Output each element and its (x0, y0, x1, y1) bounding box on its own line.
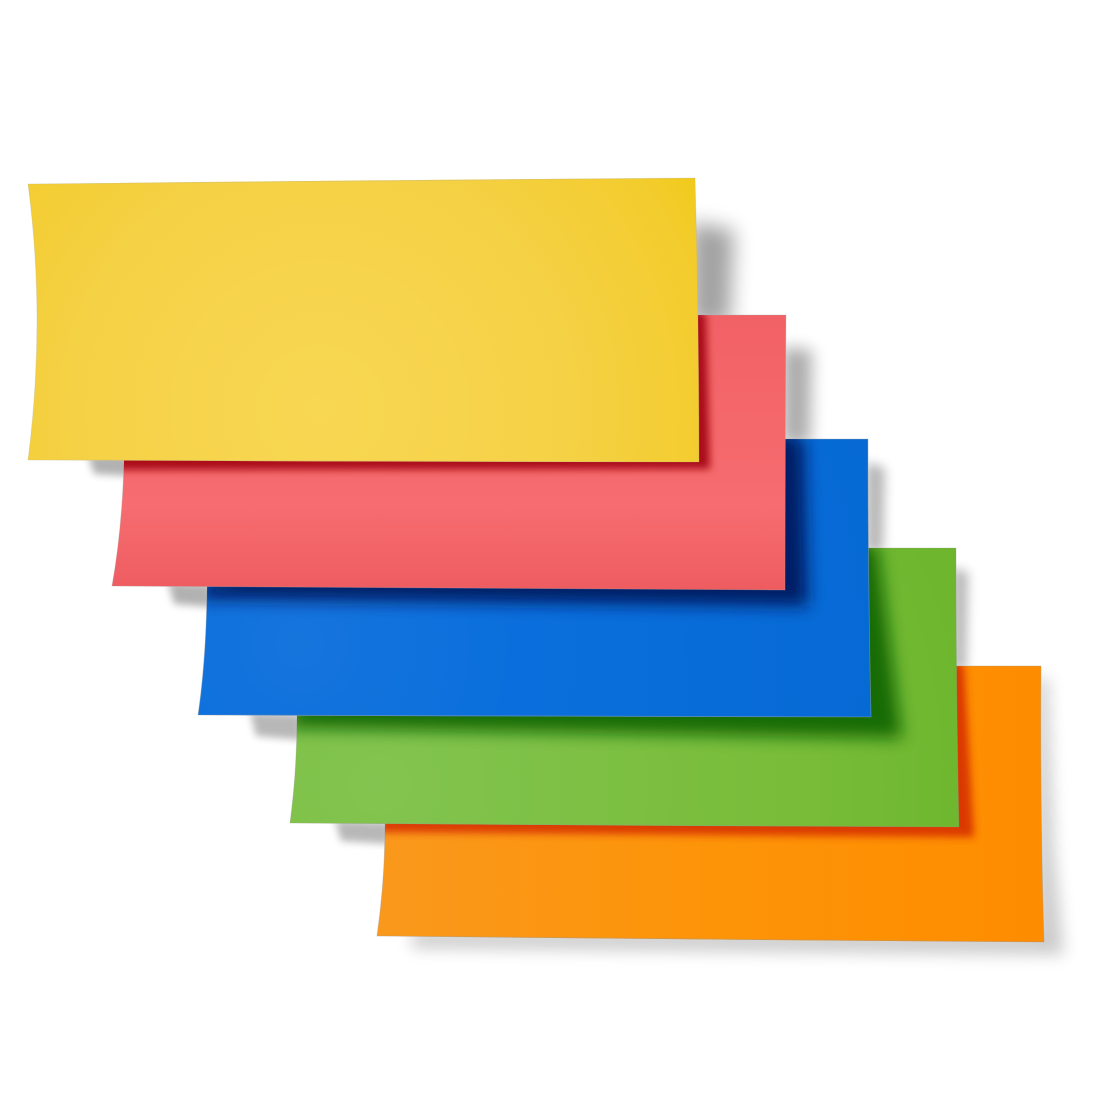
cast shadows on the white background (88, 222, 1064, 955)
yellow sheet (28, 178, 699, 462)
illustration: fanned stack of five colored sheets (28, 178, 1070, 962)
orange sheet (377, 666, 1044, 942)
shadow of red sheet on blue (200, 430, 808, 606)
red sheet (112, 315, 786, 590)
green sheet (290, 548, 959, 827)
shadow of green sheet on orange (380, 660, 974, 837)
blue sheet (198, 439, 871, 717)
shadow of blue sheet on green (290, 540, 902, 738)
shadow of yellow sheet on red (110, 308, 710, 470)
